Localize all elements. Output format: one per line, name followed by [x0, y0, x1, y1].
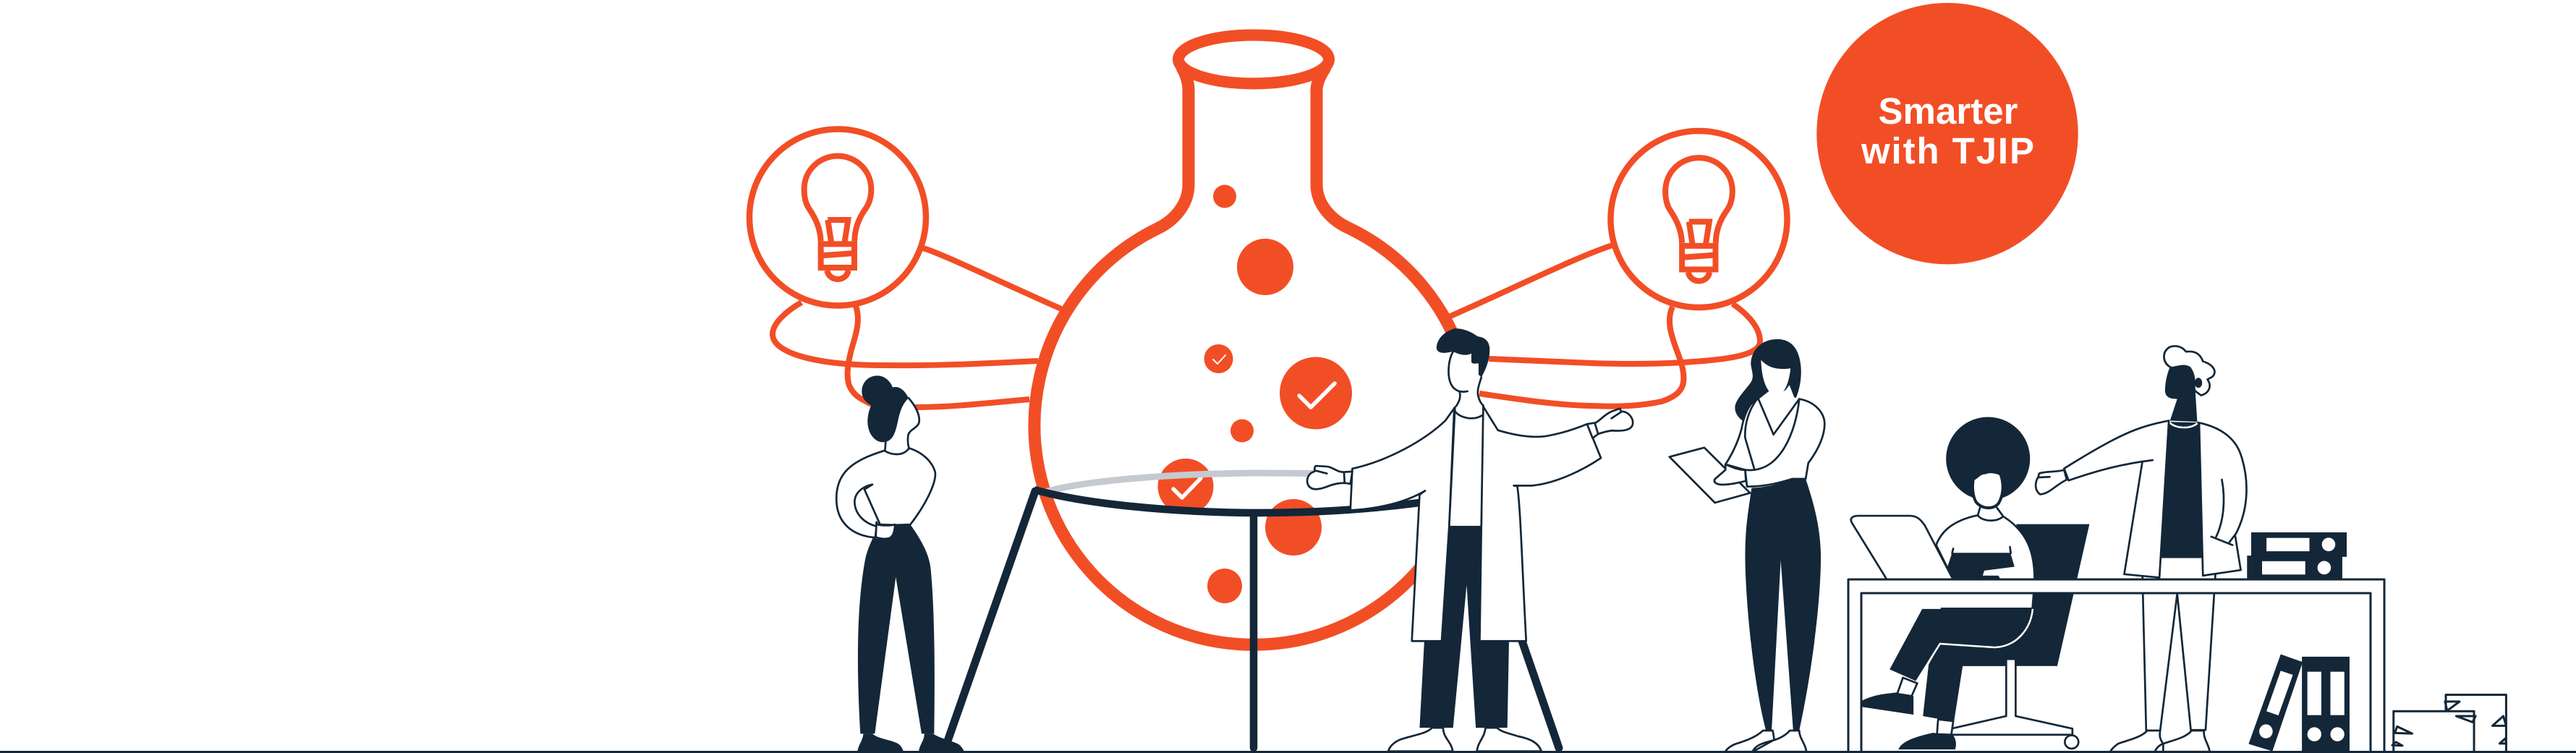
flask: [1034, 67, 1473, 644]
blouse: [1725, 399, 1824, 487]
chair back: [1963, 524, 2089, 666]
legs: [2143, 574, 2216, 731]
desk left leg strip: [1848, 593, 1861, 751]
monitor stand stripe: [1947, 553, 2015, 579]
hair: [1437, 328, 1489, 378]
shoes: [857, 733, 964, 752]
medium check bubble: [1157, 459, 1214, 514]
coat right: [2198, 422, 2247, 576]
shoes: [1388, 728, 1542, 752]
face outline: [885, 398, 919, 451]
upright binder: [2302, 657, 2350, 752]
stand centre leg: [1250, 513, 1257, 748]
left wire to flask, upper: [923, 248, 1061, 309]
pocket: [2211, 480, 2235, 545]
right wire loop: [1489, 304, 1760, 364]
crossed leg: [1890, 609, 2033, 681]
sweater: [836, 448, 935, 537]
hand: [876, 522, 895, 539]
face and neck: [2165, 365, 2197, 422]
stand ring front: [1034, 490, 1471, 513]
laptop: [1851, 516, 1999, 580]
chair base: [1951, 659, 2073, 735]
person: seated man with chair and laptop: [1851, 417, 2089, 749]
upper ankle: [1897, 678, 1917, 696]
stand left leg: [946, 491, 1035, 745]
desk right leg strip: [2371, 593, 2384, 751]
right lightbulb with wires: [1449, 131, 1787, 407]
badge text: Smarter: [1878, 90, 2018, 132]
front box: [2394, 711, 2474, 752]
person: woman with bun: [836, 375, 964, 752]
shirt hem: [2160, 558, 2203, 580]
lower shirt: [1941, 593, 2033, 608]
lower shoe: [1898, 733, 1956, 749]
face and neck: [885, 398, 919, 451]
box tape flaps: [2392, 702, 2506, 746]
left hand: [1307, 466, 1352, 489]
small check bubble: [1204, 344, 1233, 373]
shoes: [1725, 731, 1806, 752]
chair wheel: [2065, 736, 2078, 749]
left wire loop: [773, 302, 1038, 365]
face: [1761, 360, 1790, 396]
curly hair: [2164, 346, 2214, 396]
badge text: with TJIP: [1861, 130, 2034, 171]
shoes: [2110, 731, 2210, 752]
hair: [1735, 339, 1801, 421]
lower ankle: [1937, 720, 1953, 735]
icon: right lightbulb: [1665, 158, 1733, 281]
pants: [1745, 479, 1821, 731]
neck: [1759, 385, 1799, 435]
right bulb circle: [1610, 131, 1787, 307]
blouse details: [1745, 399, 1799, 470]
badge: Smarter with TJIP: [1816, 3, 2078, 264]
clipboard: [1670, 448, 1750, 503]
large check bubble: [1280, 357, 1352, 430]
left bulb circle: [749, 129, 926, 305]
stand ring back: [1045, 473, 1324, 492]
coat left panel and sleeve: [1351, 407, 1455, 641]
trousers and seat: [1923, 608, 2033, 722]
person: woman with clipboard: [1670, 339, 1824, 752]
right wire lower: [1479, 307, 1684, 407]
ground line: [0, 751, 2576, 753]
binders and boxes: [2247, 532, 2506, 752]
back box: [2446, 694, 2506, 752]
hand: [2036, 470, 2067, 494]
torso: [1937, 515, 2035, 580]
face: [1973, 472, 2003, 508]
pants: [1419, 526, 1509, 728]
neck: [1978, 508, 2003, 516]
trouser highlight: [1916, 609, 2033, 681]
person: man in lab coat: [1307, 328, 1633, 752]
person: standing man at desk: [2036, 346, 2247, 752]
binders on desk: [2247, 532, 2347, 579]
coat right panel and sleeve: [1479, 406, 1601, 641]
face outline: [1449, 352, 1483, 407]
lab stand: [946, 473, 1559, 748]
face: [1449, 352, 1483, 410]
left wire lower: [848, 306, 1029, 407]
badge circle: [1816, 3, 2078, 264]
stand right leg: [1471, 494, 1559, 748]
coat left: [2064, 421, 2169, 577]
left lightbulb with wires: [749, 129, 1061, 407]
flask mouth: [1178, 35, 1329, 84]
desk: [1848, 579, 2384, 751]
desk outline: [1848, 579, 2384, 751]
leaning binder: [2248, 655, 2303, 752]
collar and coat edges: [1449, 406, 1483, 526]
right hand: [1587, 409, 1633, 438]
right wire to flask, upper: [1449, 245, 1612, 317]
hair: [862, 375, 909, 442]
hand: [1714, 464, 1746, 485]
desk top strip: [1848, 579, 2384, 593]
shirt: [2161, 422, 2203, 558]
upper shoe: [1862, 692, 1913, 715]
t-shirt: [1449, 406, 1483, 526]
icon: left lightbulb: [804, 156, 871, 279]
bubbles in flask: [1157, 185, 1352, 603]
afro hair: [1946, 417, 2030, 501]
pants: [858, 524, 935, 733]
ear: [2195, 378, 2202, 388]
arm ticks: [1952, 547, 2011, 553]
collar: [2169, 422, 2198, 427]
